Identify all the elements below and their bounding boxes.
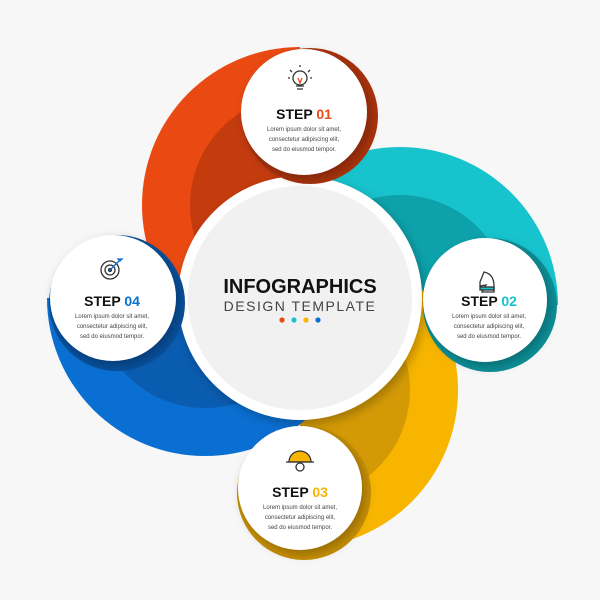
subtitle: DESIGN TEMPLATE [224, 298, 376, 314]
step 03: STEP 03 [272, 484, 328, 500]
swoosh: yellow [300, 232, 458, 548]
swoosh: blue [47, 298, 363, 456]
title: INFOGRAPHICS [223, 276, 377, 298]
step 02: sed do eiusmod tempor. [457, 334, 521, 340]
step 01 [241, 48, 378, 184]
step 04: STEP 04 [84, 293, 140, 309]
step 01: consectetur adipiscing elit, [269, 137, 340, 143]
swoosh: red [142, 47, 300, 363]
step 03: sed do eiusmod tempor. [268, 525, 332, 531]
step 01: Lorem ipsum dolor sit amet, [267, 127, 341, 133]
center circle [178, 176, 422, 420]
step 03: consectetur adipiscing elit, [265, 515, 336, 521]
step 03: Lorem ipsum dolor sit amet, [263, 505, 337, 511]
step 02: STEP 02 [461, 293, 517, 309]
step 01: sed do eiusmod tempor. [272, 147, 336, 153]
step 02 [423, 238, 557, 372]
icon: bulb [288, 65, 312, 89]
step 04: consectetur adipiscing elit, [77, 324, 148, 330]
step 03 [237, 426, 371, 560]
step 04: sed do eiusmod tempor. [80, 334, 144, 340]
step 02: Lorem ipsum dolor sit amet, [452, 314, 526, 320]
step 01: STEP 01 [276, 106, 332, 122]
icon: helmet gear [286, 451, 314, 471]
icon: target [101, 259, 122, 279]
step 04: Lorem ipsum dolor sit amet, [75, 314, 149, 320]
icon: chess knight [480, 272, 494, 292]
swoosh: teal [242, 147, 558, 305]
step 02: consectetur adipiscing elit, [454, 324, 525, 330]
colour dots [279, 317, 321, 323]
step 04 [49, 235, 185, 371]
